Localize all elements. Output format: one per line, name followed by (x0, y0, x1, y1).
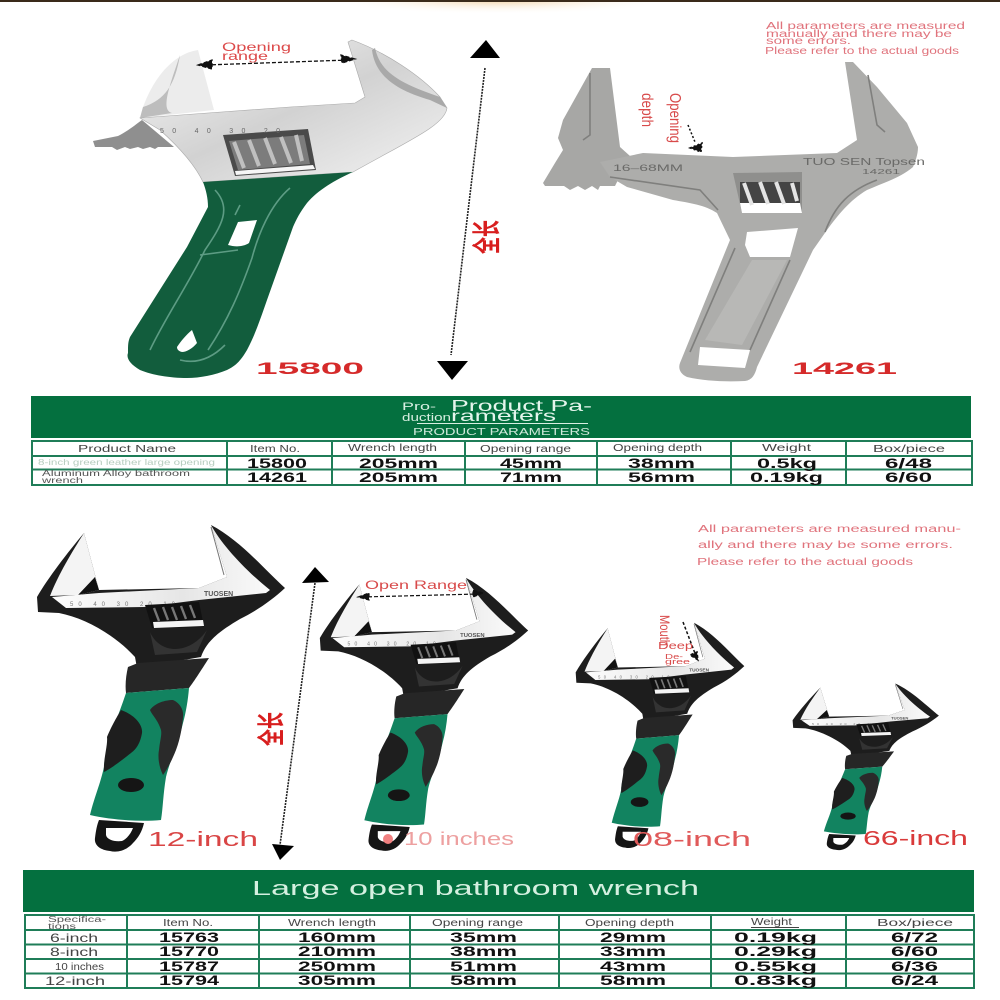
row 8-inch (50, 943, 938, 959)
icon: green handle (128, 172, 353, 378)
table header row: Opening depth (613, 443, 702, 454)
row 8-inch: 15770 (159, 943, 219, 959)
row 8-inch: 0.29kg (734, 943, 817, 959)
size labels: 08-inch (633, 829, 751, 851)
embossed text: TUO SEN Topsen (803, 157, 925, 168)
row 12-inch: 6/24 (891, 972, 938, 988)
row 15800: 38mm (628, 455, 695, 471)
row 12-inch: 305mm (298, 972, 376, 988)
note: measurement disclaimer lower: All parameters are measured manu- (698, 524, 961, 535)
table header row: Specifica- (48, 915, 107, 924)
row 12-inch: 0.83kg (734, 972, 817, 988)
panel: product parameters header (31, 396, 971, 438)
top strip (0, 0, 1000, 24)
mouth depth annotation: Deep (658, 641, 694, 652)
icon: jaw with teeth (543, 68, 630, 190)
heading: production: Pro- (402, 401, 437, 413)
row 10 inches: 6/36 (891, 958, 938, 974)
open range annotation (358, 578, 483, 600)
mouth depth annotation: De- (665, 654, 684, 661)
table header row: Opening range (432, 918, 524, 929)
overall length arrow top: 全长 (471, 220, 504, 254)
row 8-inch: 8-inch (50, 945, 98, 959)
row 8-inch: 210mm (298, 943, 376, 959)
overall length arrow lower: 全长 (256, 712, 287, 746)
note: measurement disclaimer top: some errors. (766, 36, 851, 47)
wrench 8-inch (576, 623, 744, 848)
opening depth arrow (688, 125, 702, 152)
table: product parameters (32, 441, 972, 485)
table header row: Product Name (78, 444, 177, 455)
icon: tooth bar (93, 120, 174, 150)
row 6-inch: 29mm (600, 929, 666, 945)
row 14261: 6/60 (885, 469, 932, 485)
heading: product parameters (451, 398, 592, 425)
panel: large open bathroom wrench header (23, 870, 974, 912)
row 15800 (38, 455, 932, 471)
row 15800: 8-inch green leather large opening (38, 458, 215, 467)
row 14261: 0.19kg (750, 469, 823, 485)
size labels (148, 828, 968, 851)
row 6-inch (50, 929, 938, 945)
row 15800: 0.5kg (757, 455, 817, 471)
row 6-inch: 15763 (159, 929, 219, 945)
table header row: Opening depth (585, 918, 674, 929)
wrench 10-inch (320, 578, 528, 851)
row 14261: 56mm (628, 469, 695, 485)
heading: production: duction (402, 412, 451, 424)
embossed text (613, 157, 925, 176)
row 12-inch: 15794 (159, 972, 219, 988)
opening range label (222, 40, 291, 63)
wrench 15800 (93, 40, 447, 378)
open range annotation: Open Range (365, 578, 467, 592)
note: measurement disclaimer top: manually and there may be (766, 29, 953, 40)
wrench 6-inch (793, 684, 939, 850)
opening range arrow (198, 55, 355, 69)
row 15800: 6/48 (885, 455, 932, 471)
row 8-inch: 38mm (450, 943, 517, 959)
row 14261: 71mm (500, 469, 562, 485)
note: measurement disclaimer lower: Please refer to the actual goods (697, 557, 913, 568)
table header row: Box/piece (877, 918, 954, 929)
row 6-inch: 0.19kg (734, 929, 817, 945)
row 10 inches: 10 inches (55, 962, 104, 973)
panel: large open bathroom wrench header: Large open bathroom wrench (252, 878, 699, 900)
heading: production (402, 401, 451, 424)
row 14261 (40, 469, 932, 485)
opening depth label (638, 93, 683, 143)
table header row: Weight (751, 917, 792, 928)
row 12-inch: 12-inch (45, 974, 105, 988)
overall length arrow top (437, 40, 504, 380)
icon: steel head (140, 40, 447, 182)
icon: spring (733, 172, 802, 213)
row 15800: 205mm (359, 455, 438, 471)
embossed text: 14261 (862, 169, 900, 176)
size labels: 66-inch (863, 828, 968, 850)
row 12-inch (45, 972, 938, 988)
size labels: 10 inches (404, 829, 514, 849)
table header row: Opening range (480, 444, 572, 455)
row 10 inches: 250mm (298, 958, 376, 974)
row 15800: 45mm (500, 455, 562, 471)
row 14261: 205mm (359, 469, 438, 485)
icon: aluminium body (600, 62, 918, 381)
table header row: tions (48, 922, 76, 931)
row 12-inch: 58mm (600, 972, 666, 988)
row 14261: 14261 (247, 469, 307, 485)
icon: worm gear (223, 129, 316, 176)
opening range label: Opening (222, 40, 291, 54)
opening range label: range (222, 49, 268, 63)
row 6-inch: 6/72 (891, 929, 938, 945)
note: measurement disclaimer top (765, 21, 965, 57)
overall length arrow lower (256, 567, 329, 860)
row 10 inches: 51mm (450, 958, 517, 974)
row 14261: wrench (40, 476, 83, 485)
heading: product parameters: Product Pa- (451, 398, 592, 415)
wrench 14261 (543, 62, 925, 381)
note: measurement disclaimer top: All parameters are measured (766, 21, 965, 32)
table header row: Box/piece (873, 444, 946, 455)
subheading: PRODUCT PARAMETERS (413, 427, 590, 438)
row 10 inches (55, 958, 938, 974)
icon: moving jaw (140, 50, 214, 118)
heading: product parameters: rameters (451, 408, 556, 425)
row 10 inches: 0.55kg (734, 958, 817, 974)
row 8-inch: 33mm (600, 943, 666, 959)
note: measurement disclaimer lower (697, 524, 961, 568)
size labels: 12-inch (148, 829, 258, 851)
note: measurement disclaimer top: Please refer to the actual goods (765, 46, 959, 57)
note: measurement disclaimer lower: ally and there may be some errors. (698, 540, 953, 551)
row 12-inch: 58mm (450, 972, 517, 988)
row 6-inch: 6-inch (50, 931, 98, 945)
table header row: Wrench length (288, 918, 376, 929)
row 6-inch: 35mm (450, 929, 517, 945)
table header row: Item No. (163, 918, 213, 929)
table header row: Weight (762, 443, 811, 454)
embossed text: 16–68MM (613, 163, 683, 173)
opening depth label: depth (638, 93, 655, 127)
model number 15800: 15800 (256, 359, 364, 378)
mouth depth annotation (657, 615, 698, 666)
row 10 inches: 15787 (159, 958, 219, 974)
table: large open bathroom wrench (25, 915, 974, 988)
row 8-inch: 6/60 (891, 943, 938, 959)
table header row (78, 443, 946, 455)
opening depth label: Opening (666, 93, 683, 143)
wrench 12-inch (37, 525, 285, 852)
scale numbers: 50 40 30 20 (160, 128, 280, 135)
mouth depth annotation: gree (665, 659, 690, 666)
row 6-inch: 160mm (298, 929, 376, 945)
table header row: Item No. (250, 444, 300, 455)
model number 14261: 14261 (792, 359, 897, 378)
table header row (48, 915, 954, 931)
mouth depth annotation: Mouth (657, 615, 673, 646)
row 10 inches: 43mm (600, 958, 666, 974)
row 14261: Aluminum Alloy bathroom (42, 469, 191, 478)
row 15800: 15800 (247, 455, 307, 471)
table header row: Wrench length (348, 443, 437, 454)
